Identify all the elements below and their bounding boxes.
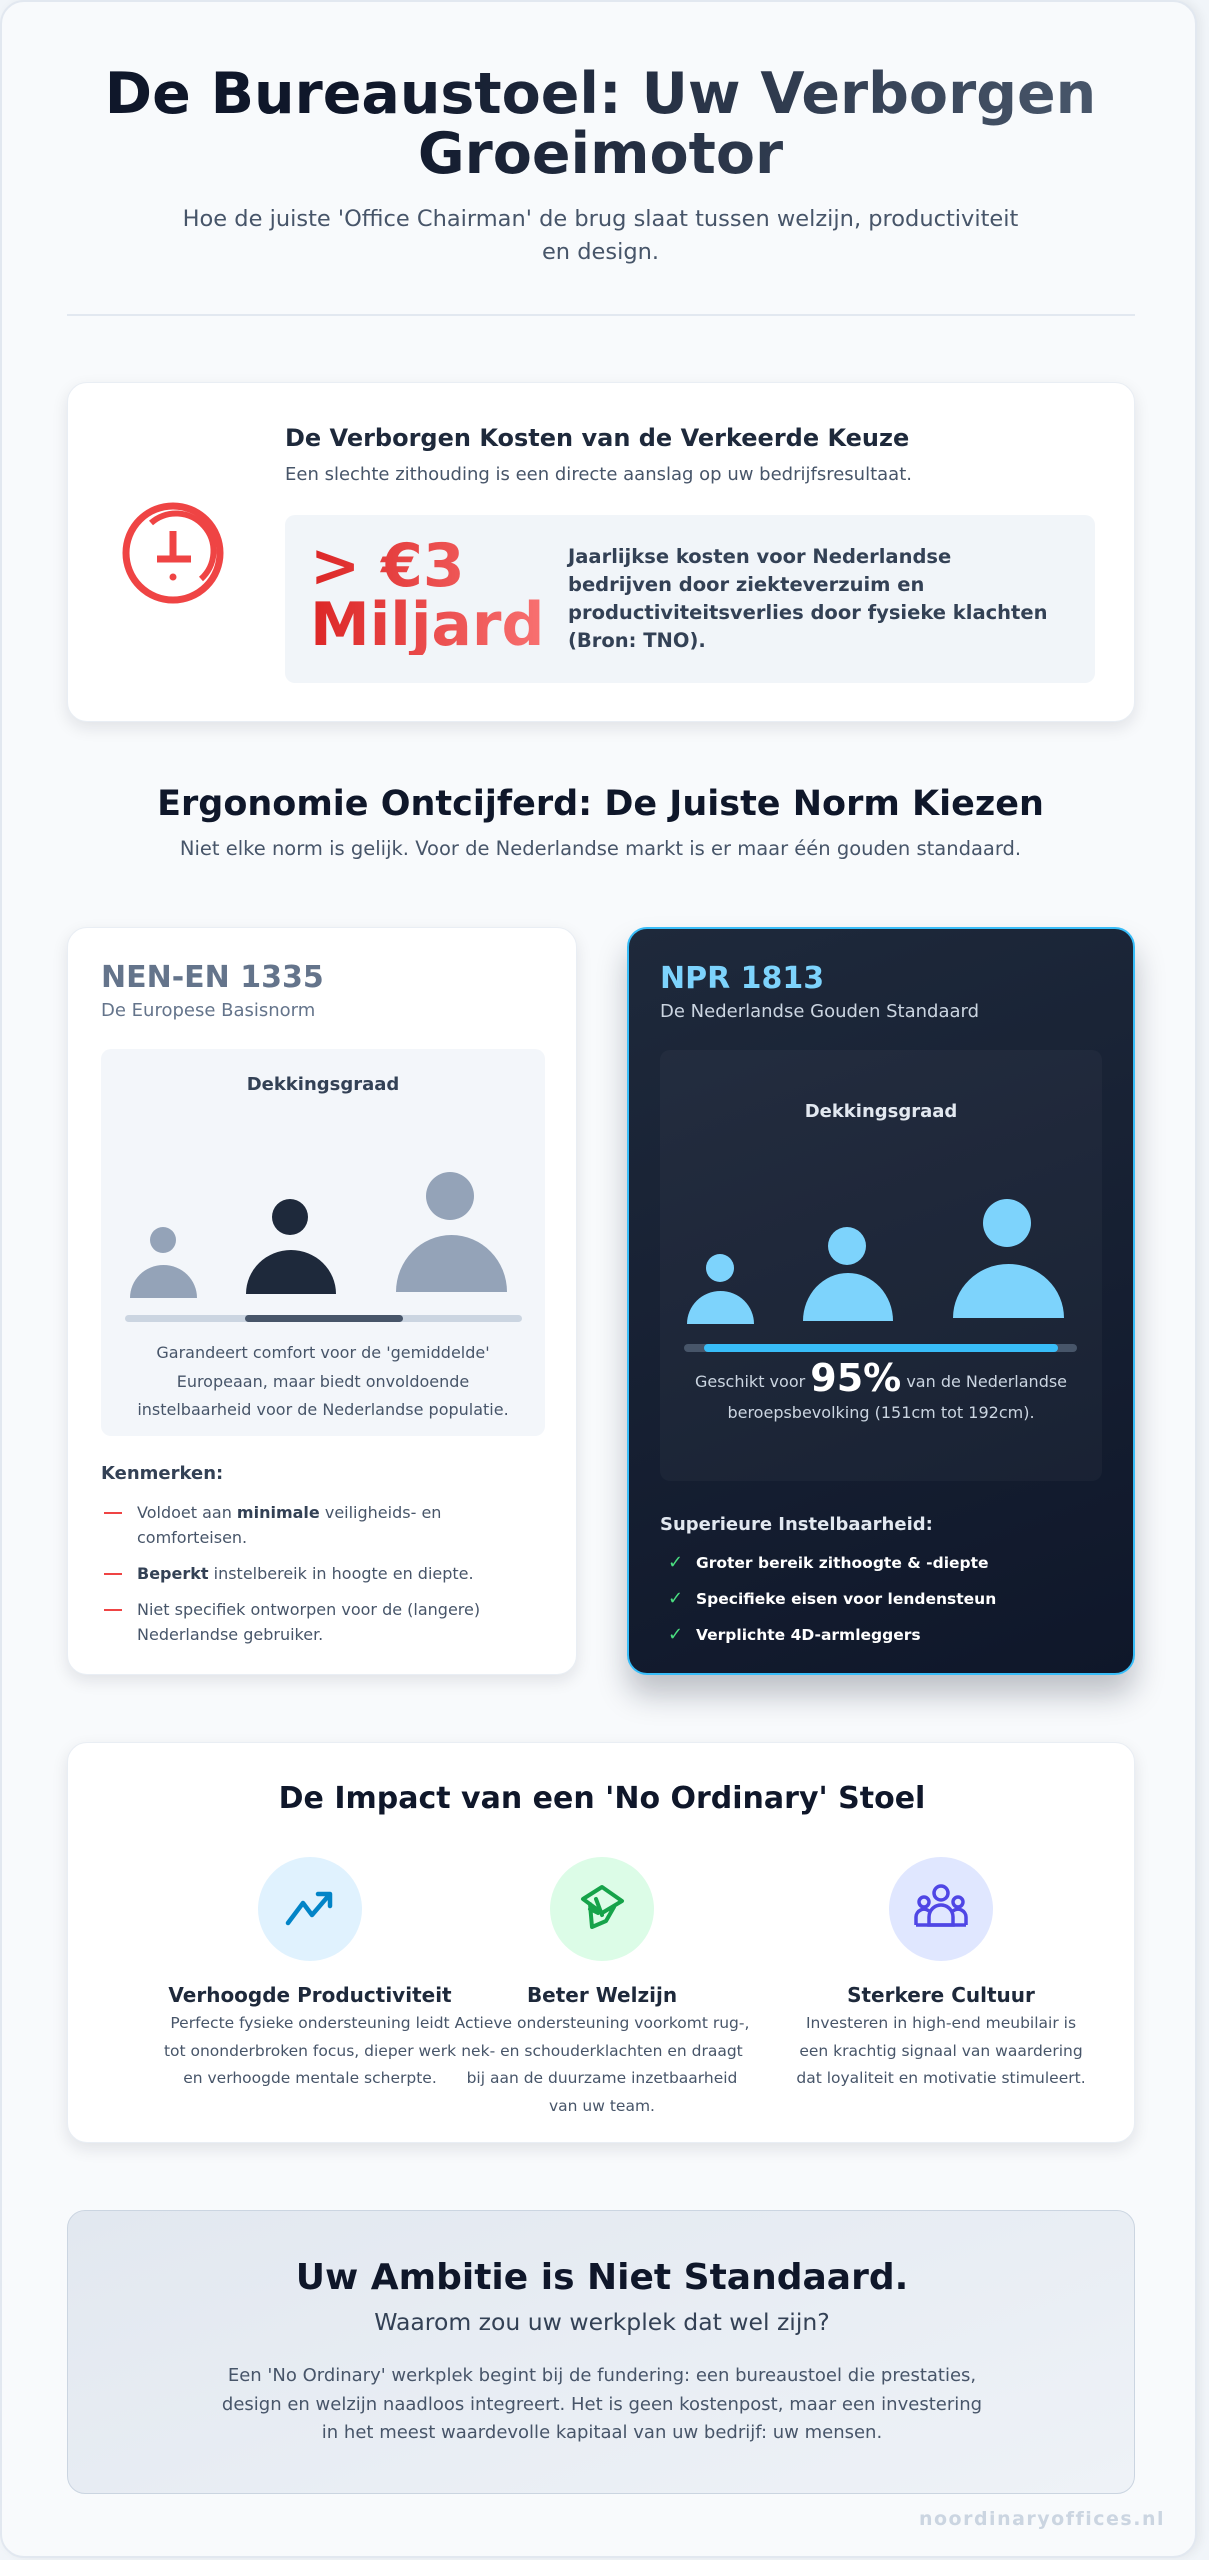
title: NEN-EN 1335 xyxy=(101,960,324,995)
big number: > €3 xyxy=(310,531,465,601)
title: NPR 1813 xyxy=(660,961,824,996)
title: De Bureaustoel: Uw Verborgen xyxy=(105,61,1096,127)
column: culture: dat loyaliteit en motivatie stimuleert. xyxy=(796,2069,1086,2087)
column: productivity: tot ononderbroken focus, dieper werk xyxy=(164,2042,456,2060)
coverage box xyxy=(101,1049,545,1436)
panel: NEN-EN 1335: De Europese Basisnorm xyxy=(101,1000,315,1021)
column: productivity xyxy=(164,1857,456,2087)
column: productivity: Perfecte fysieke ondersteuning leidt xyxy=(170,2014,450,2032)
panel: NPR 1813: De Nederlandse Gouden Standaard xyxy=(660,1001,979,1022)
subtitle xyxy=(183,206,1018,265)
heading: De Verborgen Kosten van de Verkeerde Keuze xyxy=(285,424,909,452)
column: wellbeing: van uw team. xyxy=(549,2096,655,2114)
column: productivity: en verhoogde mentale scherpte. xyxy=(183,2069,437,2087)
stat description: Jaarlijkse kosten voor Nederlandse xyxy=(568,545,951,568)
chart: people xyxy=(125,1172,522,1322)
subtitle: Hoe de juiste 'Office Chairman' de brug slaat tussen welzijn, productiviteit xyxy=(183,206,1018,232)
subheading: Waarom zou uw werkplek dat wel zijn? xyxy=(374,2308,830,2336)
column: culture: een krachtig signaal van waardering xyxy=(799,2042,1083,2060)
big number: Miljard xyxy=(310,590,544,660)
stat description: (Bron: TNO). xyxy=(568,629,706,652)
column: productivity: Verhoogde Productiviteit xyxy=(168,1983,452,2007)
features list: Kenmerken: xyxy=(101,1463,223,1484)
column: culture xyxy=(796,1857,1086,2087)
column: wellbeing: nek- en schouderklachten en draagt xyxy=(461,2042,743,2060)
column: wellbeing xyxy=(454,1857,749,2114)
features list: Superieure Instelbaarheid: xyxy=(660,1514,933,1535)
paragraph: Een 'No Ordinary' werkplek begint bij de fundering: een bureaustoel die prestaties, xyxy=(228,2365,976,2386)
column: wellbeing: Beter Welzijn xyxy=(527,1983,677,2007)
panel: NEN-EN 1335 xyxy=(67,927,577,1675)
paragraph xyxy=(222,2365,982,2443)
heading: Uw Ambitie is Niet Standaard. xyxy=(296,2257,908,2298)
panel: call to action xyxy=(67,2210,1135,2494)
stat description xyxy=(566,545,1047,652)
features list: ✓ xyxy=(668,1552,683,1573)
coverage box xyxy=(660,1050,1102,1481)
panel: hidden costs xyxy=(67,382,1135,722)
stat description: bedrijven door ziekteverzuim en xyxy=(568,573,924,596)
features list: comforteisen. xyxy=(137,1528,247,1547)
features list: Voldoet aan minimale veiligheids- en xyxy=(137,1503,441,1522)
features list xyxy=(660,1514,996,1645)
panel: impact xyxy=(67,1742,1135,2143)
icon: red clock xyxy=(122,502,224,604)
features list: Nederlandse gebruiker. xyxy=(137,1625,323,1644)
big number xyxy=(310,537,544,655)
features list: Verplichte 4D-armleggers xyxy=(696,1626,921,1644)
features list: Specifieke eisen voor lendensteun xyxy=(696,1590,996,1608)
icon: cap xyxy=(550,1857,654,1961)
features list: ✓ xyxy=(668,1624,683,1645)
section subtext: Niet elke norm is gelijk. Voor de Nederlandse markt is er maar één gouden standaard. xyxy=(180,837,1021,860)
stat box xyxy=(285,515,1095,683)
icon: trend xyxy=(258,1857,362,1961)
coverage box: Dekkingsgraad xyxy=(247,1074,399,1095)
heading: De Impact van een 'No Ordinary' Stoel xyxy=(279,1781,925,1816)
panel: NPR 1813 xyxy=(627,927,1135,1675)
section heading: Ergonomie Ontcijferd: De Juiste Norm Kiezen xyxy=(157,784,1044,824)
description: Garandeert comfort voor de 'gemiddelde' Europeaan, maar biedt onvoldoende instelbaarheid voor de Nederlandse populatie. xyxy=(137,1343,509,1419)
paragraph: in het meest waardevolle kapitaal van uw bedrijf: uw mensen. xyxy=(322,2422,882,2443)
column: wellbeing: bij aan de duurzame inzetbaarheid xyxy=(467,2069,737,2087)
column: culture: Sterkere Cultuur xyxy=(847,1983,1035,2007)
features list xyxy=(101,1463,480,1644)
subtext: Een slechte zithouding is een directe aanslag op uw bedrijfsresultaat. xyxy=(285,464,912,485)
features list: Groter bereik zithoogte & -diepte xyxy=(696,1554,989,1572)
stat description: productiviteitsverlies door fysieke klachten xyxy=(568,601,1047,624)
title xyxy=(2,64,1199,184)
paragraph: design en welzijn naadloos integreert. Het is geen kostenpost, maar een investering xyxy=(222,2394,982,2414)
column: culture: Investeren in high-end meubilair is xyxy=(806,2014,1076,2032)
title: Groeimotor xyxy=(418,121,783,187)
features list: Beperkt instelbereik in hoogte en diepte. xyxy=(137,1564,474,1583)
icon: people xyxy=(889,1857,993,1961)
stat text: Geschikt voor 95% van de Nederlandse beroepsbevolking (151cm tot 192cm). xyxy=(695,1356,1067,1422)
coverage box: Dekkingsgraad xyxy=(805,1101,957,1122)
chart: people xyxy=(684,1199,1077,1352)
features list: Niet specifiek ontworpen voor de (langere) xyxy=(137,1600,480,1619)
features list: ✓ xyxy=(668,1588,683,1609)
footer: noordinaryoffices.nl xyxy=(919,2508,1165,2530)
subtitle: en design. xyxy=(542,239,659,265)
column: wellbeing: Actieve ondersteuning voorkomt rug-, xyxy=(455,2014,749,2032)
